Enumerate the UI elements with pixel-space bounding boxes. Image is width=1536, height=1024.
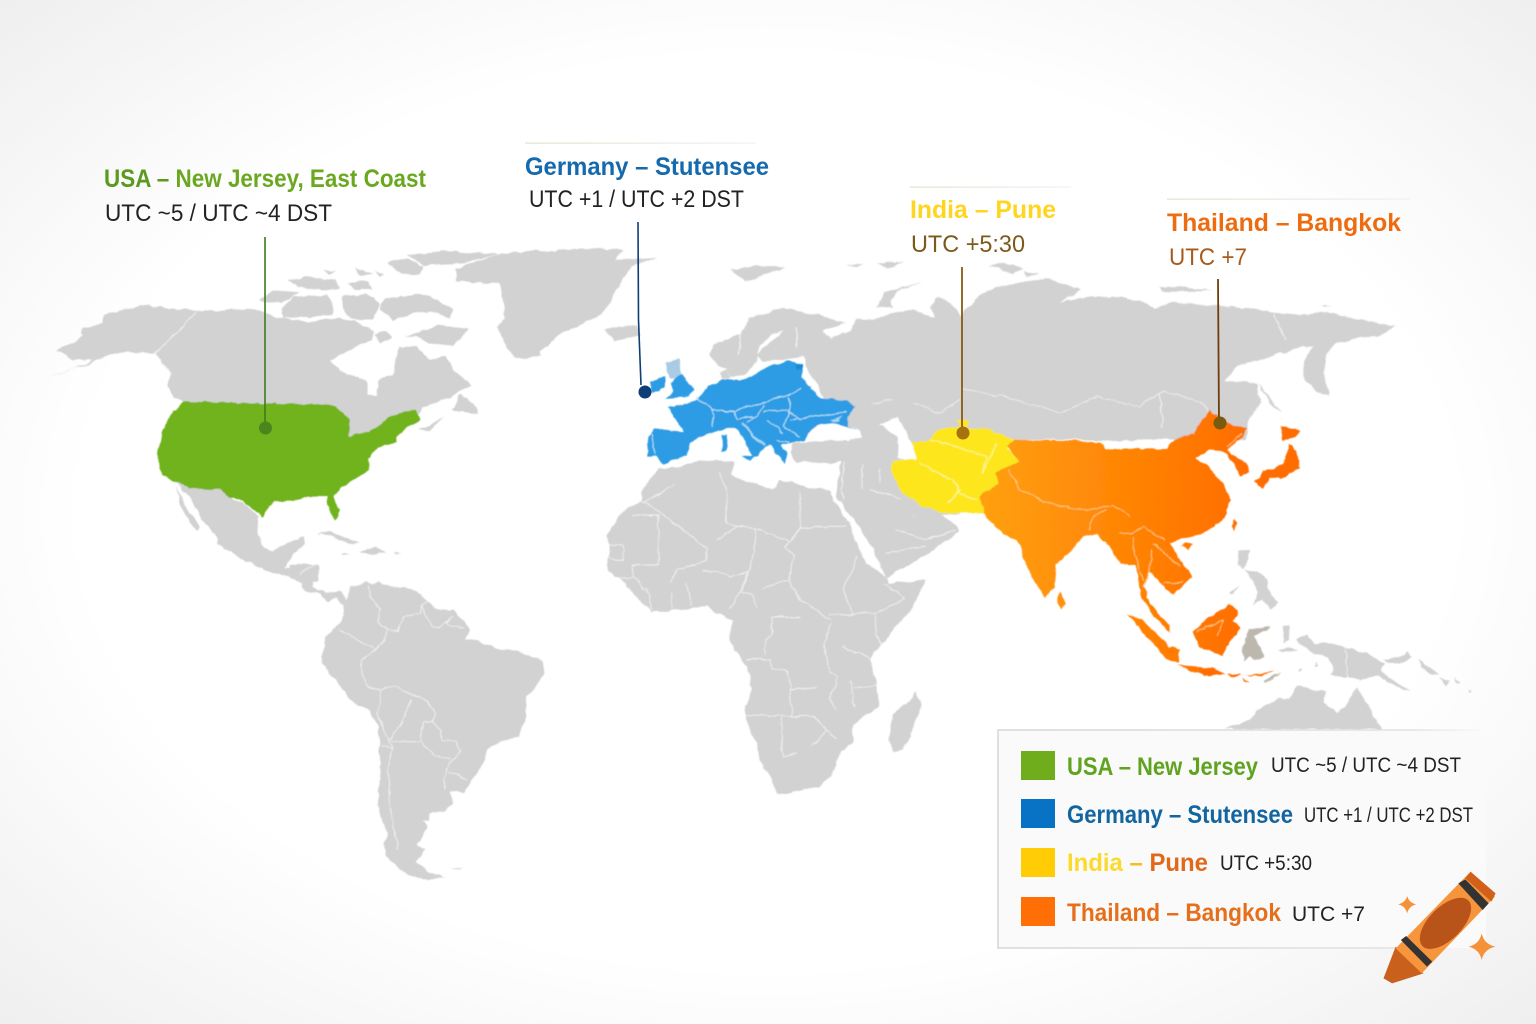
Thailand swatch xyxy=(1021,897,1055,926)
India label: India – Pune xyxy=(1067,849,1208,877)
landmass: Middle East and Turkey xyxy=(790,420,1020,577)
middle east borders xyxy=(843,462,955,553)
Germany rule xyxy=(525,142,756,144)
Germany label: Germany – Stutensee xyxy=(1067,801,1293,829)
icon: crayon with sparkles xyxy=(1383,872,1496,983)
legend panel xyxy=(998,730,1486,948)
seas xyxy=(805,423,862,442)
callout: Thailand xyxy=(1167,198,1410,430)
Germany dot xyxy=(638,386,652,398)
Caspian Sea xyxy=(880,415,917,462)
USA heading: USA – New Jersey, East Coast xyxy=(104,165,427,193)
India pointer xyxy=(961,267,963,433)
landmass: Northern Eurasia xyxy=(604,262,1395,440)
Thailand detail: UTC +7 xyxy=(1292,903,1365,926)
callout: Germany xyxy=(525,142,769,398)
India swatch xyxy=(1021,848,1055,877)
USA offset: UTC ~5 / UTC ~4 DST xyxy=(105,200,332,227)
region: Europe xyxy=(647,359,860,464)
legend frame xyxy=(998,730,1486,948)
legend row: Germany xyxy=(1021,799,1473,829)
India heading: India – Pune xyxy=(910,196,1056,224)
legend row: India xyxy=(1021,848,1312,877)
India detail: UTC +5:30 xyxy=(1220,852,1312,875)
landmass: South America xyxy=(290,563,545,880)
India dot xyxy=(956,426,970,440)
USA dot xyxy=(259,422,272,434)
legend row: Thailand xyxy=(1021,897,1365,927)
Thailand rule xyxy=(1167,198,1410,200)
landmass: Africa xyxy=(607,460,925,795)
USA label: USA – New Jersey xyxy=(1067,753,1258,781)
Germany detail: UTC +1 / UTC +2 DST xyxy=(1304,804,1473,827)
callout: India xyxy=(910,186,1071,440)
landmass: North America xyxy=(48,252,540,583)
Thailand label: Thailand – Bangkok xyxy=(1067,899,1281,927)
USA swatch xyxy=(1021,751,1055,780)
region: USA xyxy=(157,402,420,520)
world map xyxy=(48,248,1472,880)
region: South and East Asia xyxy=(980,410,1300,677)
legend row: USA xyxy=(1021,751,1461,781)
region: Central Asia xyxy=(890,420,1018,513)
landmass: Greenland east xyxy=(500,248,657,357)
legend background xyxy=(998,730,1486,948)
Thailand dot xyxy=(1214,416,1226,430)
Germany pointer xyxy=(638,222,641,385)
India offset: UTC +5:30 xyxy=(911,231,1025,258)
Thailand offset: UTC +7 xyxy=(1169,244,1247,271)
USA pointer xyxy=(264,237,266,428)
USA detail: UTC ~5 / UTC ~4 DST xyxy=(1271,754,1461,777)
Germany heading: Germany – Stutensee xyxy=(525,153,769,181)
callout: USA xyxy=(104,165,427,434)
Thailand pointer xyxy=(1218,279,1219,423)
Germany swatch xyxy=(1021,799,1055,828)
region: Oceania xyxy=(1200,549,1472,729)
India rule xyxy=(910,186,1071,188)
Germany offset: UTC +1 / UTC +2 DST xyxy=(529,186,744,213)
Thailand heading: Thailand – Bangkok xyxy=(1167,209,1401,237)
